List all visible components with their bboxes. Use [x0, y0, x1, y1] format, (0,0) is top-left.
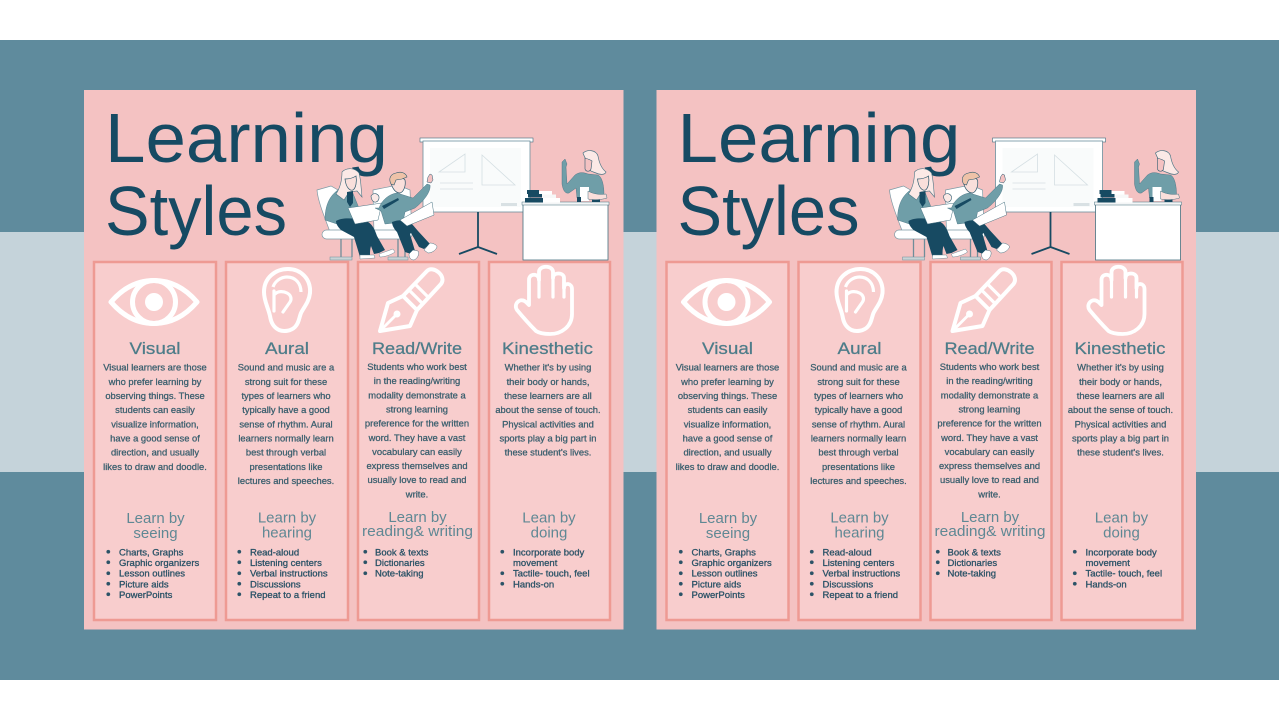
- text block: Visual description: who prefer learning by: [108, 376, 202, 387]
- text block: Kinesthetic description: Physical activities and: [502, 418, 594, 429]
- text block: Aural description: sense of rhythm. Aural: [239, 418, 333, 429]
- title: [678, 99, 960, 250]
- subheading: Learn by seeing: Learn by: [126, 510, 185, 527]
- list: Aural activities: Discussions: [250, 579, 301, 590]
- list: Read/Write activities: Book & texts: [948, 547, 1001, 558]
- panel: Kinesthetic: [1062, 262, 1182, 620]
- text block: Read/Write description: strong learning: [958, 404, 1021, 414]
- list: Visual activities: Charts, Graphs: [119, 547, 184, 558]
- list: Visual activities: •: [678, 576, 684, 591]
- list: Aural activities: Repeat to a friend: [822, 590, 898, 601]
- text block: Aural description: typically have a good: [815, 404, 902, 415]
- list: Visual activities: •: [106, 565, 111, 580]
- list: Visual activities: Lesson outlines: [119, 569, 185, 580]
- text block: Visual description: Visual learners are those: [103, 362, 207, 373]
- text block: Kinesthetic description: sports play a big part in: [1072, 432, 1169, 444]
- list: Aural activities: Repeat to a friend: [250, 590, 326, 601]
- list: Visual activities: PowerPoints: [692, 590, 745, 601]
- heading: Kinesthetic: Kinesthetic: [1074, 339, 1166, 358]
- text block: Kinesthetic description: their body or hands,: [507, 376, 589, 387]
- text block: Kinesthetic description: Physical activities and: [1075, 418, 1166, 429]
- panel: Read/Write: [930, 262, 1052, 620]
- title: Styles: [678, 172, 860, 250]
- text block: Kinesthetic description: their body or hands,: [1079, 376, 1162, 387]
- panel: Kinesthetic: [489, 262, 610, 620]
- illustration: classroom: [317, 138, 609, 260]
- list: Read/Write activities: Note-taking: [948, 569, 996, 580]
- text block: Aural description: strong suit for these: [817, 376, 900, 387]
- icon: ear: [264, 269, 310, 331]
- list: Aural activities: Verbal instructions: [250, 569, 328, 580]
- text block: Aural description: lectures and speeches.: [238, 475, 334, 486]
- list: Kinesthetic activities: •: [1072, 565, 1078, 580]
- text block: Visual description: have a good sense of: [683, 432, 773, 444]
- title: Learning: [678, 99, 960, 177]
- text block: Visual description: direction, and usually: [111, 447, 199, 458]
- list: Visual activities: •: [678, 555, 684, 570]
- text block: Aural description: Sound and music are a: [238, 362, 335, 373]
- list: Aural activities: •: [810, 565, 814, 580]
- list: Visual activities: Graphic organizers: [692, 558, 772, 569]
- list: Aural activities: •: [237, 565, 242, 580]
- subheading: Learn by hearing: Learn by: [258, 510, 317, 526]
- icon: pen: [952, 269, 1015, 331]
- subheading: Lean by doing: doing: [531, 524, 567, 542]
- list: Visual activities: •: [106, 544, 111, 559]
- icon: hand: [1088, 267, 1144, 334]
- text block: Visual description: visualize information,: [111, 418, 199, 429]
- subheading: Learn by reading & writing: Learn by: [961, 509, 1020, 526]
- subheading: Learn by seeing: seeing: [706, 525, 750, 542]
- subheading: Lean by doing: doing: [1103, 524, 1140, 542]
- list: Visual activities: Picture aids: [692, 579, 741, 590]
- subheading: Learn by reading & writing: reading& writing: [934, 523, 1046, 540]
- list: Aural activities: •: [237, 587, 242, 602]
- list: Read/Write activities: Note-taking: [375, 569, 424, 580]
- list: Kinesthetic activities: Hands-on: [1086, 579, 1127, 590]
- text block: Aural description: learners normally learn: [811, 432, 906, 444]
- panel: Aural: [226, 262, 348, 620]
- list: Kinesthetic activities: movement: [1086, 558, 1130, 569]
- text block: Aural description: best through verbal: [818, 447, 899, 458]
- text block: Aural description: Sound and music are a: [810, 362, 907, 373]
- text block: Visual description: students can easily: [115, 404, 195, 415]
- text block: Kinesthetic description: these learners are all: [504, 390, 592, 401]
- text block: Visual description: have a good sense of: [110, 432, 200, 444]
- icon: hand: [516, 267, 572, 334]
- icon: eye: [684, 280, 770, 324]
- text block: Read/Write description: strong learning: [386, 404, 448, 414]
- text block: Visual description: likes to draw and doodle.: [103, 461, 207, 472]
- list: Read/Write activities: Dictionaries: [375, 558, 425, 569]
- panel: right infographic: [656, 90, 1196, 630]
- text block: Visual description: observing things. These: [678, 390, 777, 401]
- list: Visual activities: •: [678, 544, 684, 559]
- list: Kinesthetic activities: •: [1072, 576, 1078, 591]
- list: Aural activities: •: [810, 576, 814, 591]
- subheading: Learn by hearing: Learn by: [830, 510, 889, 526]
- subheading: Learn by reading & writing: reading& writing: [362, 523, 473, 540]
- list: Kinesthetic activities: Incorporate body: [513, 547, 585, 558]
- icon: eye: [111, 280, 197, 324]
- text block: Read/Write description: preference for the written: [937, 418, 1042, 429]
- list: Aural activities: •: [810, 544, 814, 559]
- list: Aural activities: Listening centers: [250, 558, 322, 569]
- list: Aural activities: •: [237, 544, 242, 559]
- list: Visual activities: •: [106, 555, 111, 570]
- list: Kinesthetic activities: Tactile- touch, feel: [1086, 569, 1162, 580]
- heading: Aural: Aural: [265, 339, 309, 358]
- text block: Kinesthetic description: about the sense of touch.: [495, 404, 601, 415]
- panel: Visual: [94, 262, 216, 620]
- text block: Kinesthetic description: sports play a big part in: [500, 432, 596, 444]
- text block: Read/Write description: Students who work best: [940, 361, 1040, 372]
- subheading: Learn by seeing: Learn by: [699, 510, 758, 527]
- list: Read/Write activities: •: [936, 544, 940, 559]
- text block: Visual description: students can easily: [688, 404, 768, 415]
- text block: Visual description: who prefer learning by: [680, 376, 774, 387]
- list: Read/Write activities: •: [363, 565, 368, 580]
- list: Aural activities: Discussions: [822, 579, 873, 590]
- icon: ear: [836, 269, 883, 331]
- text block: Read/Write description: express themselves and: [366, 460, 468, 471]
- subheading: Learn by hearing: hearing: [262, 524, 312, 542]
- list: Kinesthetic activities: Tactile- touch, feel: [513, 569, 590, 580]
- text block: Aural description: learners normally learn: [238, 432, 334, 444]
- text block: Read/Write description: word. They have a vast: [368, 432, 466, 443]
- list: Aural activities: Read-aloud: [250, 547, 299, 558]
- list: Read/Write activities: •: [363, 555, 368, 570]
- heading: Visual: Visual: [130, 339, 180, 358]
- list: Visual activities: Lesson outlines: [692, 569, 758, 580]
- subheading: Lean by doing: Lean by: [522, 510, 576, 526]
- list: Visual activities: •: [678, 587, 684, 602]
- list: Aural activities: Listening centers: [822, 558, 895, 569]
- panel: Read/Write: [358, 262, 479, 620]
- text block: Aural description: typically have a good: [242, 404, 330, 415]
- list: Aural activities: •: [237, 576, 242, 591]
- heading: Read/Write: Read/Write: [372, 339, 462, 358]
- text block: Kinesthetic description: these student's lives.: [505, 447, 591, 458]
- list: Kinesthetic activities: •: [500, 544, 505, 559]
- list: Read/Write activities: Book & texts: [375, 547, 429, 558]
- list: Visual activities: Picture aids: [119, 579, 169, 590]
- text block: Read/Write description: modality demonstrate a: [941, 389, 1039, 400]
- heading: Kinesthetic: Kinesthetic: [502, 339, 594, 358]
- panel: Visual: [666, 262, 788, 620]
- list: Visual activities: PowerPoints: [119, 590, 173, 601]
- text block: Visual description: visualize information,: [684, 418, 771, 429]
- heading: Aural: Aural: [838, 339, 882, 358]
- icon: pen: [380, 269, 442, 331]
- text block: Aural description: presentations like: [822, 461, 895, 472]
- text block: Read/Write description: usually love to read and: [367, 474, 467, 485]
- text block: Visual description: Visual learners are those: [676, 362, 779, 373]
- subheading: Learn by hearing: hearing: [834, 524, 885, 542]
- text block: Aural description: sense of rhythm. Aural: [812, 418, 905, 429]
- list: Aural activities: •: [237, 555, 242, 570]
- list: Kinesthetic activities: Hands-on: [513, 579, 554, 590]
- list: Aural activities: Read-aloud: [822, 547, 872, 558]
- title: Learning: [105, 99, 388, 177]
- list: Aural activities: •: [810, 555, 814, 570]
- text block: Read/Write description: word. They have a vast: [940, 432, 1038, 443]
- list: Read/Write activities: •: [936, 555, 940, 570]
- title: [105, 99, 388, 250]
- illustration: classroom: [890, 138, 1182, 260]
- list: Aural activities: Verbal instructions: [822, 569, 900, 580]
- text block: Read/Write description: express themselves and: [939, 460, 1040, 471]
- text block: Kinesthetic description: these learners are all: [1077, 390, 1164, 401]
- text block: Kinesthetic description: about the sense of touch.: [1068, 404, 1173, 415]
- text block: Read/Write description: write.: [977, 488, 1001, 499]
- text block: Read/Write description: modality demonstrate a: [368, 389, 467, 400]
- text block: Aural description: presentations like: [250, 461, 322, 472]
- list: Kinesthetic activities: •: [1072, 544, 1078, 559]
- list: Visual activities: •: [678, 565, 684, 580]
- list: Kinesthetic activities: Incorporate body: [1086, 547, 1157, 558]
- list: Visual activities: Charts, Graphs: [692, 547, 756, 558]
- list: Kinesthetic activities: movement: [513, 558, 558, 569]
- list: Aural activities: •: [810, 587, 814, 602]
- list: Visual activities: •: [106, 587, 111, 602]
- text block: Aural description: types of learners who: [814, 390, 903, 401]
- text block: Read/Write description: Students who work best: [367, 361, 467, 372]
- text block: Kinesthetic description: these student's lives.: [1077, 447, 1164, 458]
- list: Visual activities: •: [106, 576, 111, 591]
- text block: Read/Write description: usually love to read and: [940, 474, 1039, 485]
- heading: Visual: Visual: [702, 339, 753, 358]
- text block: Read/Write description: in the reading/writing: [946, 375, 1033, 386]
- list: Visual activities: Graphic organizers: [119, 558, 200, 569]
- list: Read/Write activities: •: [936, 565, 940, 580]
- panel: left infographic: [84, 90, 624, 630]
- subheading: Lean by doing: Lean by: [1095, 510, 1149, 526]
- text block: Visual description: likes to draw and doodle.: [676, 461, 779, 472]
- subheading: Learn by reading & writing: Learn by: [388, 509, 447, 526]
- text block: Aural description: best through verbal: [246, 447, 326, 458]
- text block: Visual description: observing things. These: [105, 390, 205, 401]
- text block: Read/Write description: vocabulary can easily: [372, 446, 462, 457]
- text block: Visual description: direction, and usually: [683, 447, 772, 458]
- text block: Read/Write description: vocabulary can easily: [945, 446, 1035, 457]
- text block: Read/Write description: write.: [405, 488, 428, 499]
- panel: Aural: [798, 262, 920, 620]
- text block: Read/Write description: in the reading/writing: [374, 375, 460, 386]
- list: Kinesthetic activities: •: [500, 576, 505, 591]
- text block: Kinesthetic description: Whether it's by using: [1077, 362, 1164, 373]
- text block: Aural description: lectures and speeches.: [810, 475, 907, 486]
- heading: Read/Write: Read/Write: [944, 339, 1034, 358]
- text block: Aural description: strong suit for these: [245, 376, 327, 387]
- text block: Aural description: types of learners who: [241, 390, 331, 401]
- text block: Kinesthetic description: Whether it's by using: [505, 362, 591, 373]
- text block: Read/Write description: preference for the written: [365, 418, 469, 429]
- title: Styles: [105, 172, 287, 250]
- subheading: Learn by seeing: seeing: [133, 525, 178, 542]
- list: Read/Write activities: Dictionaries: [948, 558, 997, 569]
- list: Kinesthetic activities: •: [500, 565, 505, 580]
- list: Read/Write activities: •: [363, 544, 368, 559]
